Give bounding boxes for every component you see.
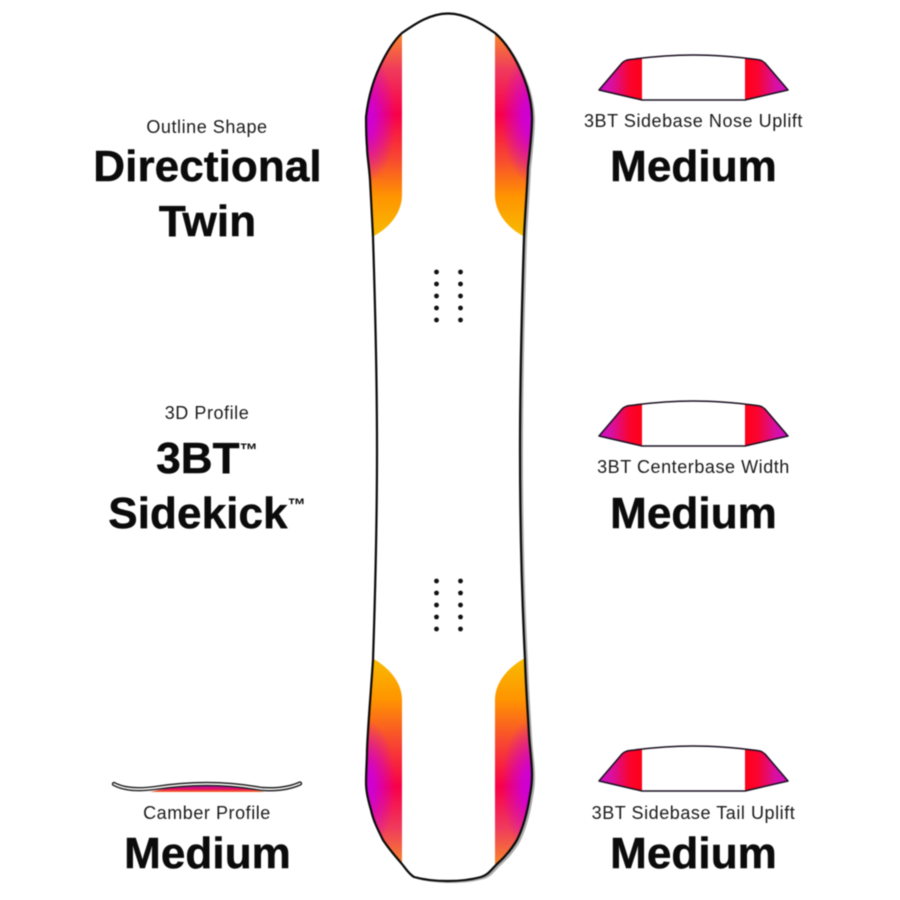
tail left zone	[366, 658, 403, 863]
camber profile spec	[114, 784, 300, 878]
tail uplift diagram	[599, 746, 788, 791]
3D profile label: 3D Profile	[165, 403, 249, 423]
nose right zone	[494, 34, 532, 236]
3D profile value line 2: Sidekick	[108, 489, 288, 538]
3D profile value: ™	[240, 440, 258, 460]
3D profile value line 2: ™	[288, 495, 306, 515]
nose uplift diagram	[599, 55, 788, 100]
outline shape value line 2: Twin	[159, 197, 256, 246]
board outline	[366, 14, 532, 881]
tail uplift label: 3BT Sidebase Tail Uplift	[592, 803, 795, 823]
board shadow	[369, 16, 535, 883]
nose uplift spec	[584, 55, 803, 191]
snowboard spec infographic	[95, 12, 803, 884]
centerbase label: 3BT Centerbase Width	[597, 457, 790, 477]
lower binding inserts	[434, 579, 463, 631]
snowboard	[360, 14, 540, 883]
colour zones	[366, 34, 532, 865]
camber diagram	[114, 784, 300, 792]
outline shape value: Directional	[93, 142, 322, 191]
3D profile spec	[108, 403, 306, 538]
centerbase value: Medium	[610, 489, 777, 538]
tail uplift spec	[592, 746, 795, 878]
3D profile value: 3BT	[156, 434, 240, 483]
upper binding inserts	[434, 270, 463, 322]
camber value: Medium	[124, 829, 291, 878]
outline shape spec	[93, 117, 322, 246]
tail right zone	[494, 658, 532, 865]
outline shape label: Outline Shape	[146, 117, 268, 137]
camber label: Camber Profile	[143, 803, 271, 823]
nose uplift value: Medium	[610, 142, 777, 191]
centerbase diagram	[599, 401, 788, 446]
board base	[366, 14, 532, 881]
centerbase width spec	[597, 401, 790, 538]
nose uplift label: 3BT Sidebase Nose Uplift	[584, 111, 803, 131]
nose left zone	[366, 34, 403, 236]
tail uplift value: Medium	[610, 829, 777, 878]
